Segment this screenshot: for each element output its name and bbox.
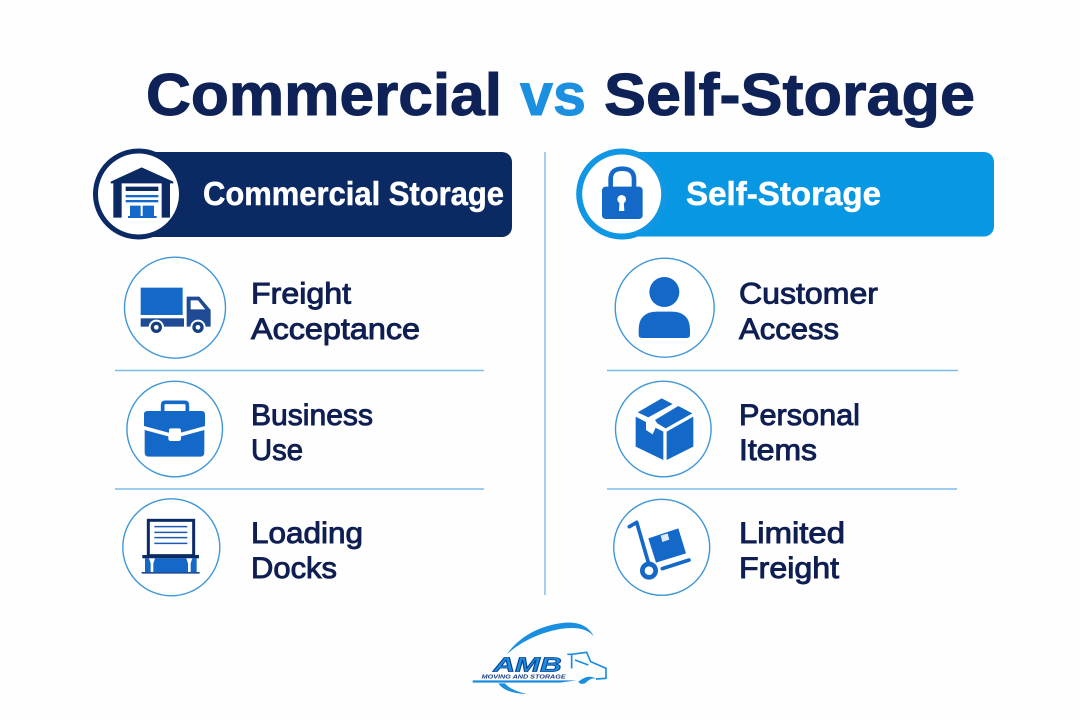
icon: briefcase	[144, 402, 205, 457]
logo: AMB moving and storage: MOVING AND STORAGE	[482, 674, 566, 680]
self-storage header	[579, 152, 994, 236]
icon: hand truck	[629, 522, 689, 577]
item: business use: Business	[251, 399, 373, 432]
logo: AMB moving and storage: AMB	[492, 654, 562, 677]
item: freight acceptance: Freight	[251, 278, 352, 310]
item: loading docks	[123, 499, 363, 596]
title: Self-Storage	[604, 62, 975, 128]
self-storage header: Self-Storage	[686, 175, 881, 212]
item: customer access: Access	[739, 313, 839, 346]
item: business use	[127, 381, 373, 477]
item: customer access: Customer	[739, 278, 878, 310]
title	[146, 62, 975, 128]
item: limited freight: Freight	[739, 552, 840, 585]
panel: commercial storage	[96, 151, 512, 596]
icon: box	[636, 398, 693, 460]
item: personal items: Personal	[739, 399, 860, 432]
icon: warehouse	[111, 167, 173, 218]
title: Commercial	[146, 62, 502, 128]
item: loading docks: Docks	[251, 552, 337, 585]
panel: self-storage	[579, 152, 994, 595]
item: business use: Use	[251, 434, 303, 467]
icon: truck	[141, 288, 211, 335]
icon: loading dock	[142, 520, 200, 574]
icon: padlock	[602, 169, 643, 219]
icon: person	[639, 277, 690, 338]
commercial storage header: Commercial Storage	[203, 175, 504, 212]
item: personal items	[616, 381, 860, 477]
item: freight acceptance: Acceptance	[251, 313, 420, 346]
commercial storage header	[96, 151, 512, 237]
logo: AMB moving and storage	[473, 622, 606, 694]
title: vs	[520, 62, 586, 128]
item: limited freight: Limited	[739, 517, 845, 550]
item: loading docks: Loading	[251, 517, 363, 550]
item: personal items: Items	[739, 434, 817, 467]
item: limited freight	[614, 499, 845, 595]
item: freight acceptance	[124, 257, 420, 358]
item: customer access	[615, 258, 878, 357]
